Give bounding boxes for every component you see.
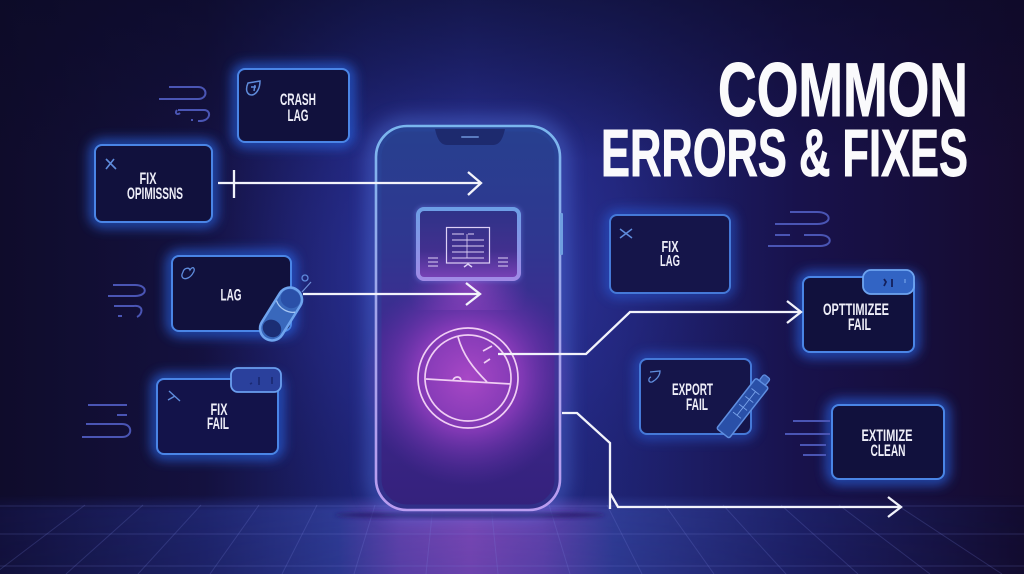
arrow: fix to phone xyxy=(218,170,481,198)
speed lines: bottom left xyxy=(82,405,130,437)
tab xyxy=(863,270,914,294)
label: CLEAN xyxy=(870,442,906,460)
label: LAG xyxy=(660,253,680,270)
phone notch xyxy=(435,129,505,145)
gauge dial xyxy=(418,328,518,428)
icon: glyph xyxy=(649,371,660,382)
label: LAG xyxy=(288,106,308,125)
card: fix optimissions xyxy=(95,145,212,222)
icon: marker pen xyxy=(717,372,773,438)
tab xyxy=(231,368,281,392)
label: FAIL xyxy=(686,396,708,414)
label xyxy=(823,301,889,334)
speed lines: mid left xyxy=(108,285,145,317)
phone xyxy=(361,126,575,510)
label xyxy=(280,90,316,125)
label: OPTTIMIZEE xyxy=(823,301,889,319)
label: EXPORT xyxy=(672,381,713,399)
arrow: phone to bottom right xyxy=(562,413,901,517)
floor xyxy=(0,495,1024,574)
speed lines: top left xyxy=(159,87,209,121)
arrow: dial to optimizee xyxy=(498,301,801,354)
card: export fail xyxy=(640,359,751,434)
screen card in phone xyxy=(400,206,536,310)
label: FIX xyxy=(140,170,156,188)
label xyxy=(207,401,229,433)
label xyxy=(672,381,713,414)
speed lines: bottom right xyxy=(785,421,830,455)
phone shadow xyxy=(335,512,605,518)
card: lag xyxy=(172,256,291,331)
grid floor xyxy=(0,505,1024,574)
icon: cross xyxy=(620,229,632,238)
label: FIX xyxy=(662,239,679,256)
icon: cross xyxy=(106,159,116,169)
icon: document xyxy=(428,228,508,267)
card: extimize clean xyxy=(832,405,944,479)
label: OPIMISSNS xyxy=(127,185,183,203)
speed lines: top right xyxy=(768,212,830,246)
icon: cross xyxy=(168,391,180,401)
label: EXTIMIZE xyxy=(862,427,912,445)
label: FAIL xyxy=(848,316,871,334)
icon: capsule tool xyxy=(255,275,311,345)
label: FIX xyxy=(210,401,228,419)
title xyxy=(601,48,968,191)
label: CRASH xyxy=(280,90,316,109)
icon: glyph xyxy=(182,268,194,279)
card: fix lag xyxy=(610,215,730,293)
arrow: lag to phone xyxy=(303,283,480,305)
icon: glyph xyxy=(247,81,260,95)
label: FAIL xyxy=(207,415,229,433)
card: crash lag xyxy=(238,69,349,142)
label xyxy=(862,427,912,460)
side button xyxy=(560,213,563,255)
label xyxy=(660,239,680,270)
label xyxy=(127,170,183,203)
card: optimizee fail xyxy=(803,270,914,352)
label: LAG xyxy=(220,286,242,304)
card: fix fail xyxy=(157,368,281,454)
